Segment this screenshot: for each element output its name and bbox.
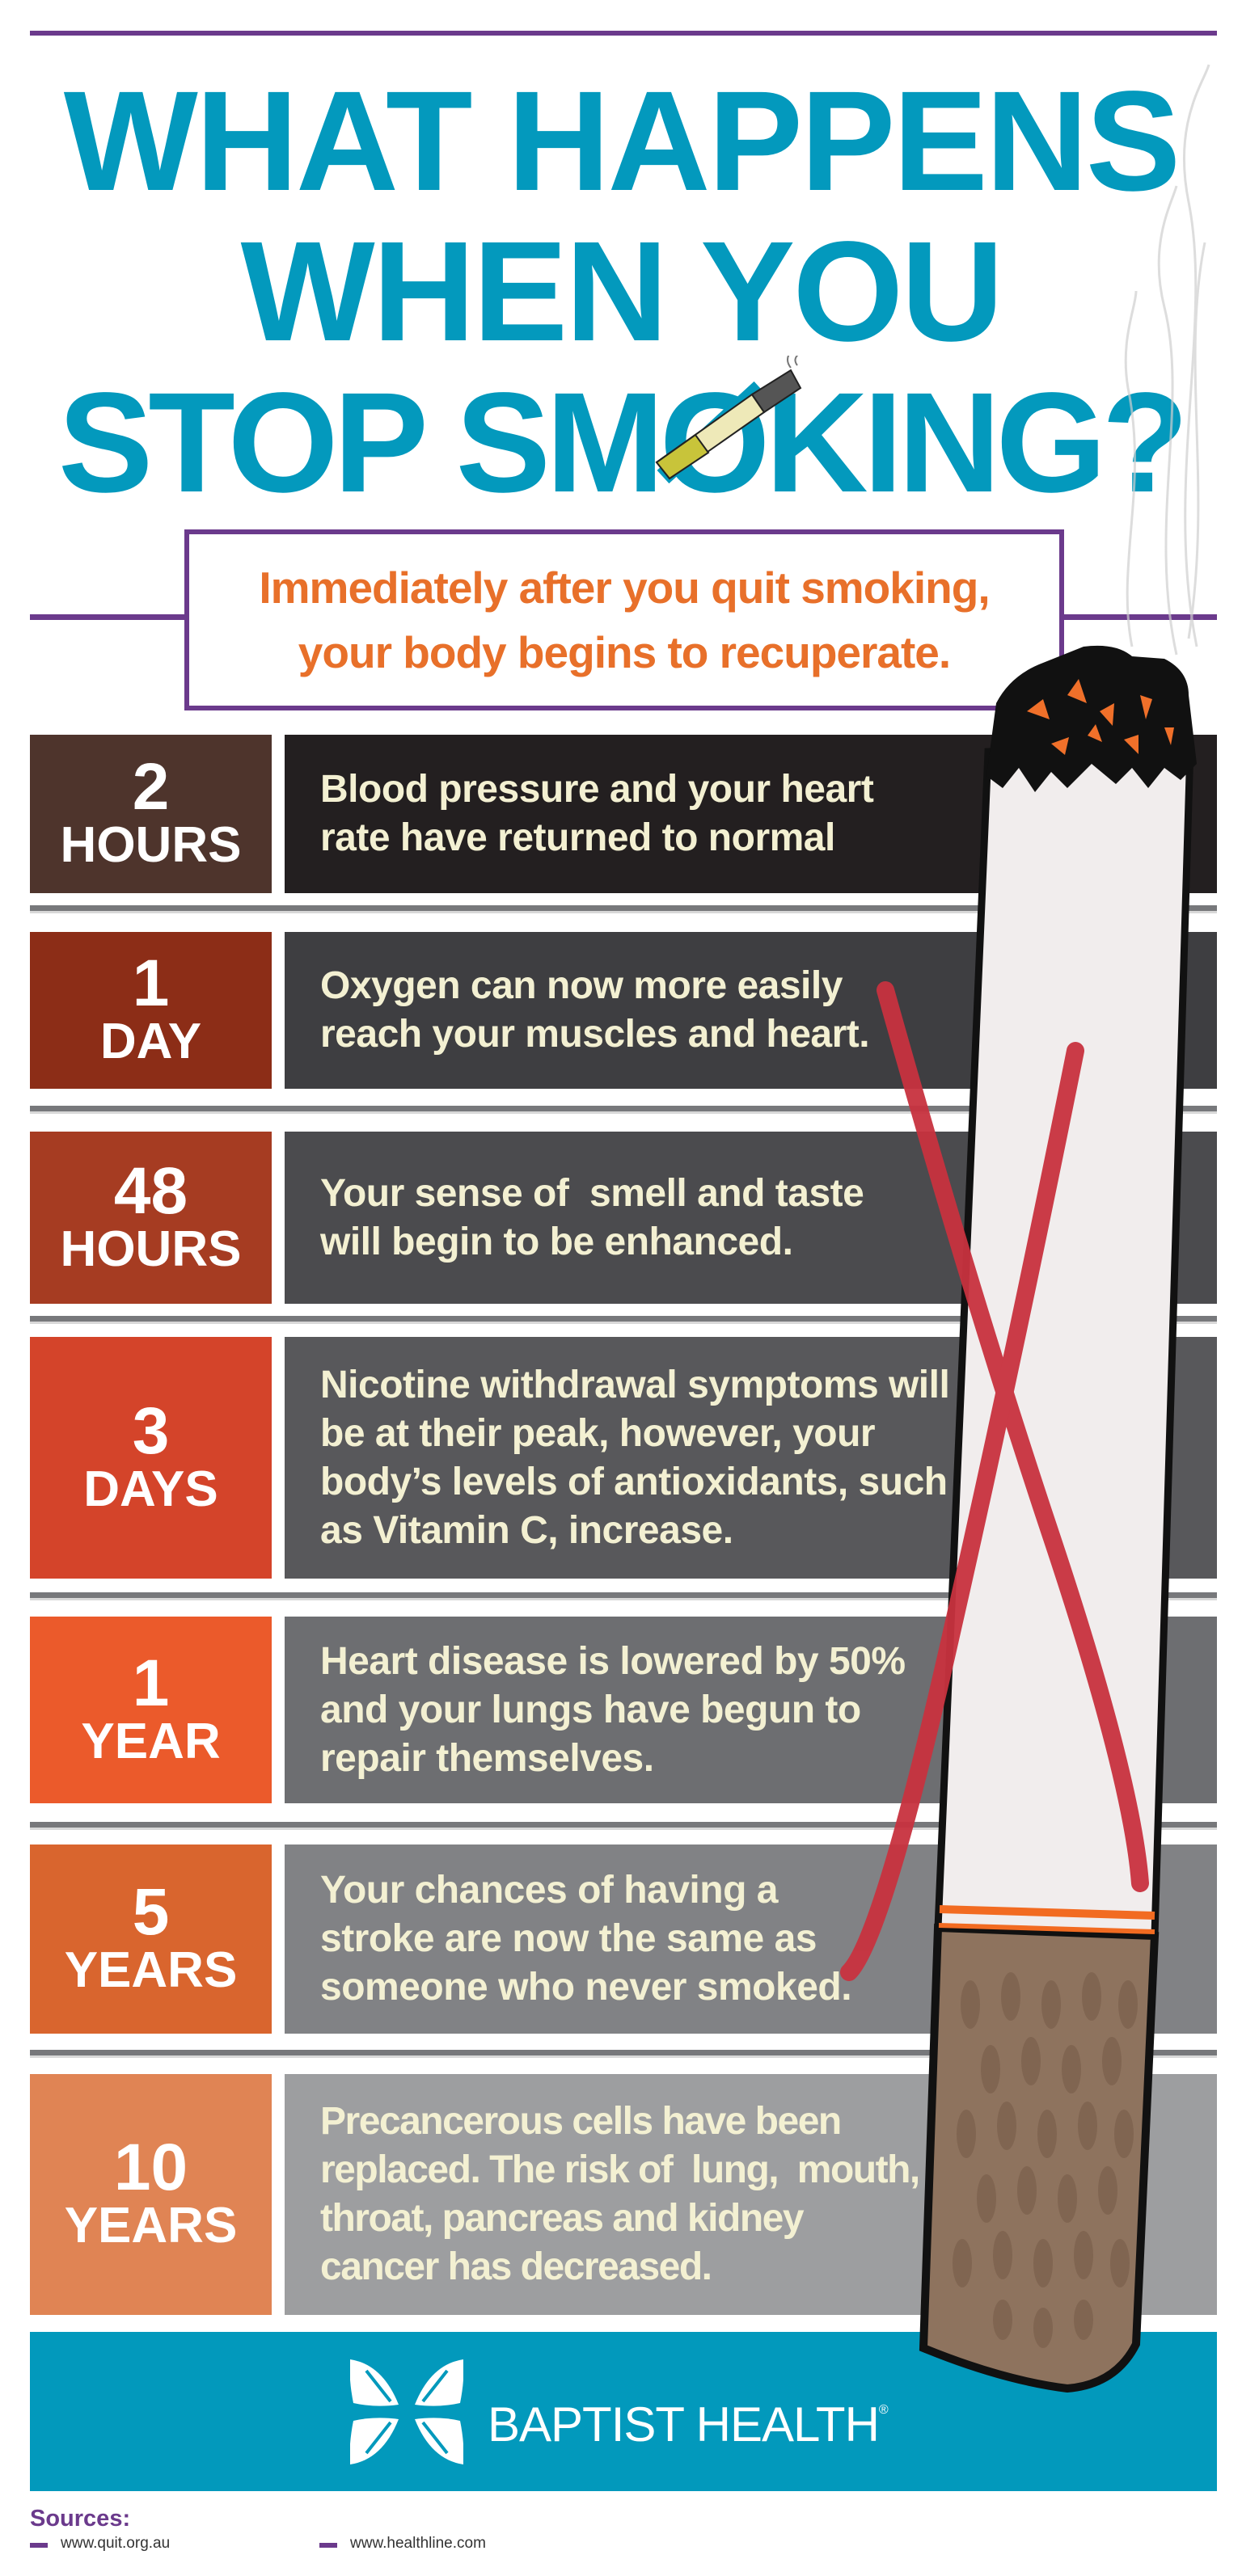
row: 10 years: cancer has decreased.	[320, 2245, 712, 2288]
row: 10 years: YEARS	[65, 2198, 237, 2253]
row: 1 day: Oxygen can now more easily	[320, 964, 843, 1007]
subtitle box	[184, 529, 1064, 710]
row: 48 hours	[30, 1132, 1217, 1304]
row: 5 years: Your chances of having a	[320, 1869, 778, 1912]
icon: small cigarette crossing the O	[655, 356, 802, 483]
row: 10 years: Precancerous cells have been	[320, 2100, 841, 2143]
subtitle box: your body begins to recuperate.	[298, 627, 950, 677]
row: 1 year: YEAR	[81, 1714, 221, 1769]
title: WHEN YOU	[241, 213, 1001, 371]
footer: Baptist Health banner: BAPTIST HEALTH®	[488, 2397, 888, 2452]
top purple rule	[30, 31, 1217, 36]
sources: Sources:	[30, 2506, 130, 2532]
row: 10 years: replaced. The risk of lung, mouth,	[320, 2148, 919, 2191]
row: 1 day: reach your muscles and heart.	[320, 1013, 869, 1056]
title	[58, 62, 1184, 522]
row: 3 days: body’s levels of antioxidants, such	[320, 1460, 948, 1503]
row: 5 years: someone who never smoked.	[320, 1966, 851, 2009]
row: 1 year: Heart disease is lowered by 50%	[320, 1639, 906, 1683]
row: 1 year: 1	[133, 1646, 169, 1720]
row: 10 years	[30, 2074, 1217, 2315]
row: 1 day: 1	[133, 947, 169, 1020]
row: 5 years	[30, 1845, 1217, 2034]
row: 1 year: and your lungs have begun to	[320, 1688, 861, 1731]
row: 10 years: 10	[114, 2131, 188, 2204]
row: 3 days: be at their peak, however, your	[320, 1411, 875, 1455]
row: 2 hours: Blood pressure and your heart	[320, 768, 873, 811]
row: 3 days: as Vitamin C, increase.	[320, 1508, 733, 1552]
row: 48 hours: will begin to be enhanced.	[320, 1221, 792, 1263]
row: 3 days: Nicotine withdrawal symptoms will	[320, 1363, 949, 1406]
row: 3 days: DAYS	[83, 1461, 218, 1516]
row: 1 year: repair themselves.	[320, 1736, 654, 1780]
row: 1 day: DAY	[100, 1014, 201, 1069]
body	[938, 748, 1190, 1936]
filter	[923, 1928, 1155, 2388]
footer: Baptist Health banner	[30, 2332, 1217, 2491]
title: STOP SMOKING?	[58, 364, 1184, 522]
row: 5 years: 5	[133, 1875, 169, 1949]
purple rule behind subtitle	[30, 614, 1217, 620]
row: 5 years: stroke are now the same as	[320, 1917, 817, 1960]
orange bands	[940, 1909, 1155, 1916]
title: WHAT HAPPENS	[64, 62, 1178, 221]
row: 10 years: throat, pancreas and kidney	[320, 2197, 803, 2240]
ash	[986, 646, 1197, 792]
row: 48 hours: 48	[114, 1154, 188, 1227]
row: 1 year	[30, 1617, 1217, 1803]
row: 3 days: 3	[133, 1393, 169, 1468]
sources: www.healthline.com	[350, 2535, 486, 2552]
row: 2 hours: 2	[133, 750, 169, 824]
row: 3 days	[30, 1337, 1217, 1579]
row: 1 day	[30, 932, 1217, 1089]
row: 2 hours: HOURS	[61, 817, 241, 873]
row: 2 hours: rate have returned to normal	[320, 816, 835, 859]
row: 48 hours: Your sense of smell and taste	[320, 1172, 864, 1214]
sources: www.quit.org.au	[61, 2535, 170, 2552]
row: 5 years: YEARS	[65, 1942, 237, 1998]
row: 48 hours: HOURS	[61, 1221, 241, 1277]
red X	[849, 990, 1140, 1972]
sources	[30, 2506, 486, 2552]
icon: Baptist Health leaves logo	[350, 2359, 463, 2464]
row: 2 hours	[30, 735, 1217, 893]
subtitle box: Immediately after you quit smoking,	[259, 563, 990, 613]
